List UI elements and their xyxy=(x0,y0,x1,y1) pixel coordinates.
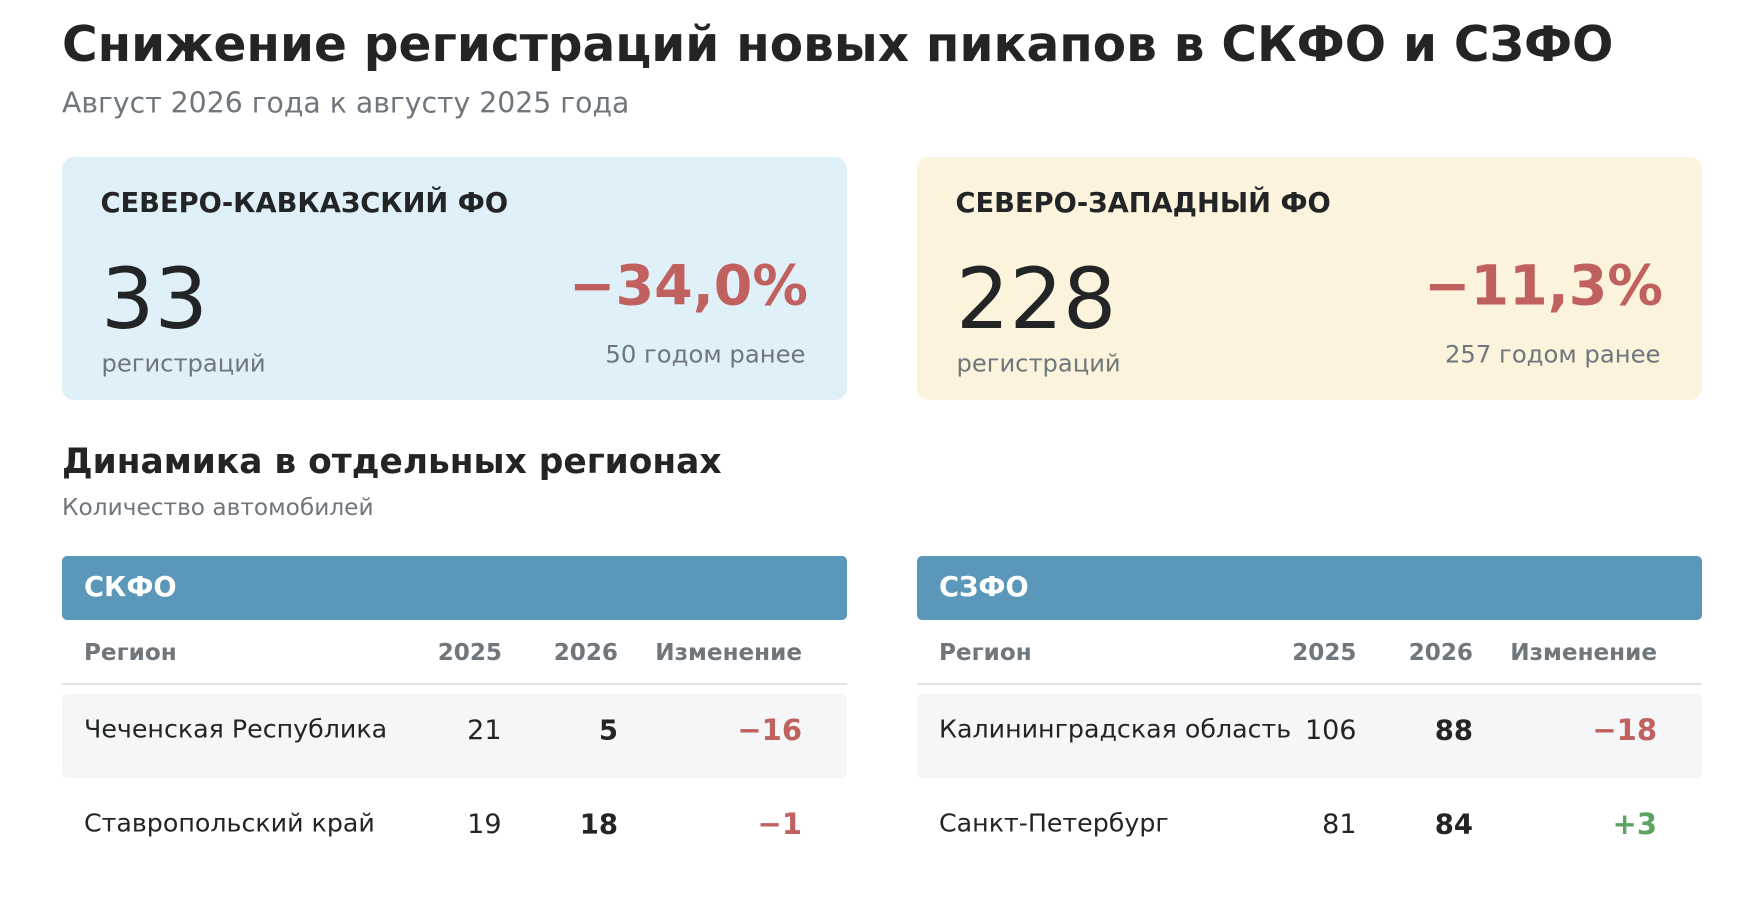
column headers: 2025 xyxy=(1292,640,1356,666)
percent change: −11,3% xyxy=(1424,254,1663,318)
column headers: Регион xyxy=(939,640,1032,666)
subtitle: Август 2026 года к августу 2025 года xyxy=(62,86,629,120)
row: Kaliningrad xyxy=(917,694,1702,778)
column headers: Изменение xyxy=(1510,640,1657,666)
previous year note: 257 годом ранее xyxy=(1445,340,1660,368)
row: Kaliningrad: 88 xyxy=(1435,714,1473,746)
title: Снижение регистраций новых пикапов в СКФО и СЗФО xyxy=(62,17,1613,73)
row: Chechnya xyxy=(62,694,847,778)
row: Chechnya: 21 xyxy=(467,715,502,746)
table header bar xyxy=(917,556,1702,620)
column headers: Изменение xyxy=(655,640,802,666)
table title: СКФО xyxy=(84,572,177,603)
panel: North West xyxy=(917,157,1702,400)
table: SZFO xyxy=(917,556,1702,841)
section subtitle: Количество автомобилей xyxy=(62,494,374,521)
row: Stavropol: Ставропольский край xyxy=(84,808,375,838)
row: Kaliningrad: Калининградская область xyxy=(939,714,1291,744)
row: Chechnya: Чеченская Республика xyxy=(84,714,387,744)
row: Stavropol xyxy=(84,807,802,841)
column headers: 2025 xyxy=(438,640,502,666)
registrations label: регистраций xyxy=(102,350,266,378)
row: Stavropol: 19 xyxy=(467,809,502,840)
row: Stavropol: −1 xyxy=(758,807,802,841)
row: Saint Petersburg: 81 xyxy=(1322,809,1356,840)
panel: North Caucasus xyxy=(62,157,847,400)
column headers: Регион xyxy=(84,640,177,666)
row: Saint Petersburg: Санкт-Петербург xyxy=(939,808,1169,838)
row: Chechnya: 5 xyxy=(599,714,618,746)
row: Stavropol: 18 xyxy=(580,808,618,840)
column headers: 2026 xyxy=(554,640,618,666)
table: SKFO xyxy=(62,556,847,841)
panel heading: СЕВЕРО-КАВКАЗСКИЙ ФО xyxy=(100,187,508,219)
section heading: Динамика в отдельных регионах xyxy=(62,442,722,482)
row: Saint Petersburg xyxy=(939,807,1657,841)
column headers: 2026 xyxy=(1409,640,1473,666)
percent change: −34,0% xyxy=(569,254,808,318)
row: Saint Petersburg: 84 xyxy=(1435,808,1473,840)
row: Saint Petersburg: +3 xyxy=(1613,807,1657,841)
column headers xyxy=(84,640,802,666)
previous year note: 50 годом ранее xyxy=(605,340,806,368)
big number: 228 xyxy=(956,250,1116,348)
row: Kaliningrad: −18 xyxy=(1592,713,1657,747)
table title: СЗФО xyxy=(939,572,1029,603)
big number: 33 xyxy=(101,250,208,348)
registrations label: регистраций xyxy=(956,350,1121,378)
row: Chechnya: −16 xyxy=(737,713,802,747)
column headers xyxy=(939,640,1657,666)
row: Kaliningrad: 106 xyxy=(1305,715,1356,746)
panel heading: СЕВЕРО-ЗАПАДНЫЙ ФО xyxy=(956,187,1331,219)
table header bar xyxy=(62,556,847,620)
